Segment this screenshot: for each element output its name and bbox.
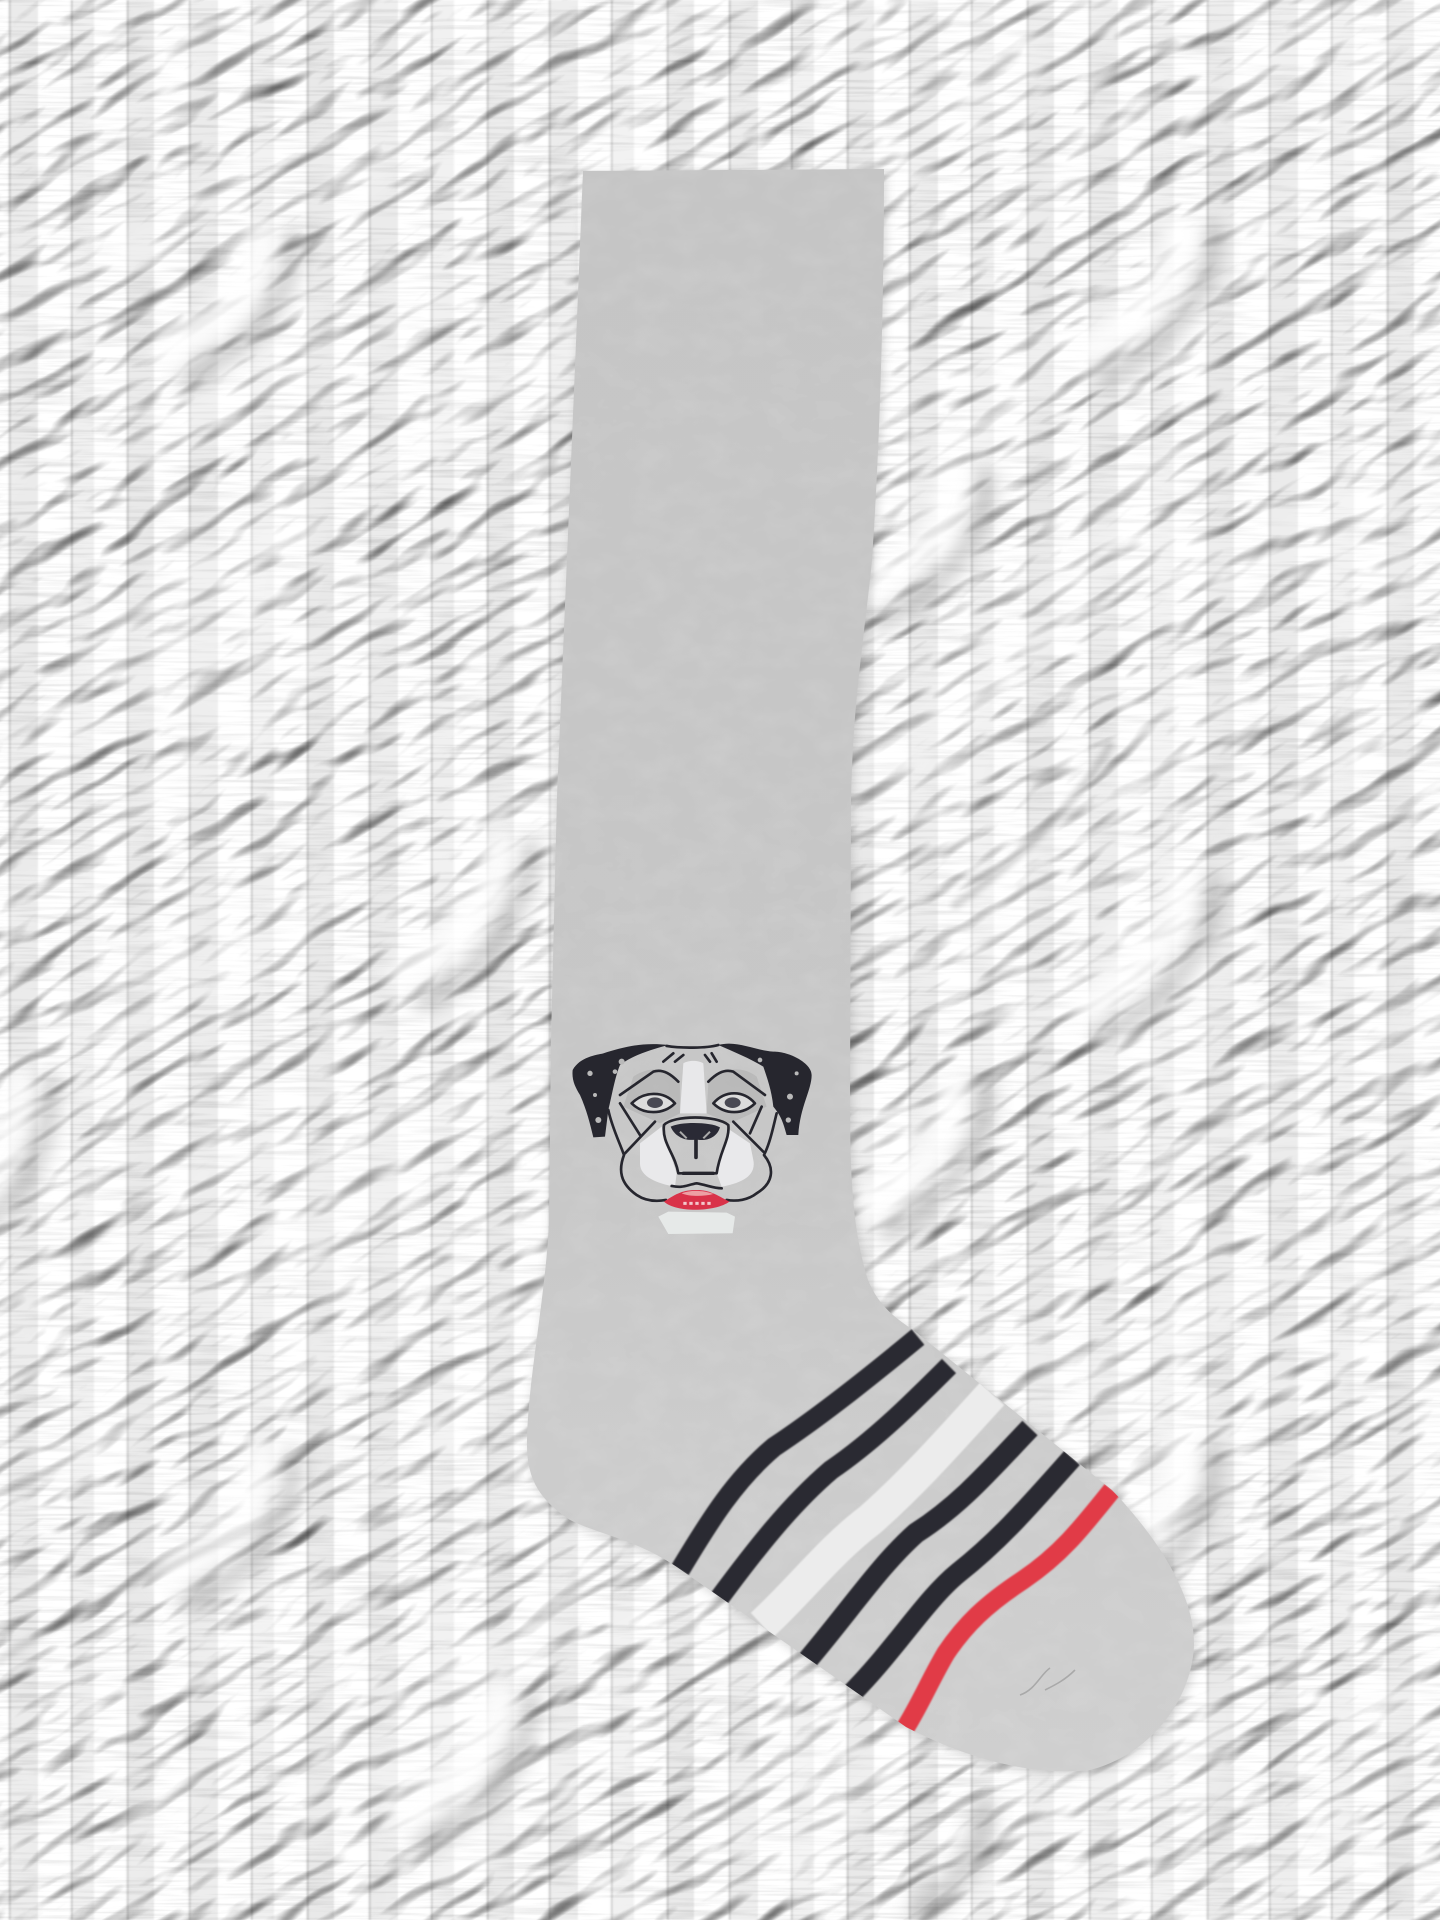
dog motif <box>572 1044 812 1234</box>
sock body <box>527 169 1194 1771</box>
white stripe <box>762 1394 992 1625</box>
eyes <box>647 1097 741 1108</box>
nose <box>671 1123 720 1140</box>
toe stitch mark <box>1020 1668 1075 1695</box>
stripes on foot <box>680 1337 1112 1730</box>
sock shadow <box>529 172 1196 1774</box>
sock <box>527 169 1194 1771</box>
cable bumps and seams <box>0 235 1212 1910</box>
collar tag <box>658 1212 735 1234</box>
black stripe 3 <box>806 1428 1030 1662</box>
mouth and tongue <box>664 1190 729 1210</box>
ears <box>572 1044 812 1137</box>
red stripe <box>904 1490 1112 1730</box>
face lines <box>608 1045 777 1201</box>
face patches <box>623 1061 767 1187</box>
black stripe 2 <box>718 1366 949 1600</box>
black stripe 1 <box>680 1337 918 1570</box>
black stripe 4 <box>850 1458 1072 1695</box>
